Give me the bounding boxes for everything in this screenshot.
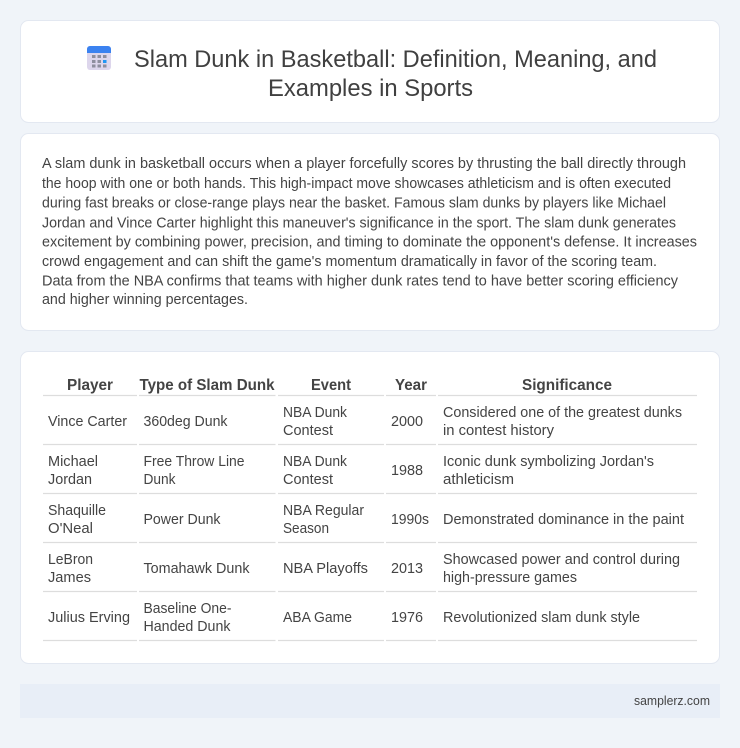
- row: Julius Erving: Baseline One-: [144, 601, 232, 617]
- row: Julius Erving: Julius Erving: [48, 610, 130, 626]
- title: [134, 46, 657, 102]
- row: Shaquille O'Neal: Power Dunk: [144, 512, 221, 528]
- text block: description: and higher winning percentages.: [42, 292, 248, 308]
- text block: description: Jordan and Vince Carter highlight this maneuver's significance in the sport. The slam dunk generates: [42, 216, 676, 232]
- row: LeBron James: [48, 552, 680, 586]
- row: LeBron James: high-pressure games: [443, 570, 577, 586]
- row: Shaquille O'Neal: NBA Regular: [283, 503, 364, 519]
- row: LeBron James: Tomahawk Dunk: [144, 561, 250, 577]
- table header: Year: [395, 377, 427, 394]
- row: Michael Jordan: Iconic dunk symbolizing Jordan's: [443, 454, 654, 470]
- row: LeBron James: James: [48, 570, 91, 586]
- footer bar: [20, 684, 720, 718]
- table: [43, 377, 697, 640]
- row: Shaquille O'Neal: O'Neal: [48, 521, 93, 537]
- title: Examples in Sports: [268, 75, 473, 102]
- table header: [67, 377, 612, 394]
- row: Shaquille O'Neal: Demonstrated dominance in the paint: [443, 512, 684, 528]
- row: Shaquille O'Neal: [48, 503, 684, 537]
- row: Michael Jordan: Michael: [48, 454, 98, 470]
- row: Michael Jordan: Jordan: [48, 472, 92, 488]
- row: Julius Erving: Revolutionized slam dunk style: [443, 610, 640, 626]
- row: Vince Carter: NBA Dunk: [283, 405, 348, 421]
- row: Vince Carter: Vince Carter: [48, 414, 127, 430]
- row: Michael Jordan: [48, 454, 654, 488]
- panel: title card: [20, 20, 720, 122]
- row: Michael Jordan: Contest: [283, 472, 333, 488]
- row: Shaquille O'Neal: 1990s: [391, 512, 429, 528]
- text block: description: [42, 156, 697, 308]
- table header: Player: [67, 377, 113, 394]
- text block: description: A slam dunk in basketball occurs when a player forcefully scores by thrusting the ball directly through: [42, 156, 686, 172]
- text block: description: the hoop with one or both hands. This high-impact move showcases athleticism and is often executed: [42, 176, 671, 192]
- row: LeBron James: NBA Playoffs: [283, 561, 368, 577]
- text block: description: during fast breaks or close-range plays near the basket. Famous slam dunks by players like Michael: [42, 196, 666, 212]
- row: Michael Jordan: NBA Dunk: [283, 454, 348, 470]
- text block: description: crowd engagement and can shift the game's momentum dramatically in favor of the scoring team.: [42, 254, 657, 270]
- row: LeBron James: Showcased power and control during: [443, 552, 680, 568]
- row: Michael Jordan: athleticism: [443, 472, 514, 488]
- row: Michael Jordan: Dunk: [144, 472, 176, 488]
- row: Vince Carter: in contest history: [443, 423, 555, 439]
- row: Vince Carter: Contest: [283, 423, 333, 439]
- table header: Type of Slam Dunk: [140, 377, 275, 394]
- title: Slam Dunk in Basketball: Definition, Meaning, and: [134, 46, 657, 73]
- text block: description: Data from the NBA confirms that teams with higher dunk rates tend to have better scoring efficiency: [42, 274, 679, 290]
- row: Michael Jordan: 1988: [391, 463, 423, 479]
- row: Shaquille O'Neal: Shaquille: [48, 503, 106, 519]
- footer text: samplerz.com: [634, 693, 710, 708]
- row: Vince Carter: 360deg Dunk: [144, 414, 228, 430]
- row: Shaquille O'Neal: Season: [283, 521, 329, 537]
- table header: Significance: [522, 377, 612, 394]
- row: Michael Jordan: Free Throw Line: [144, 454, 244, 470]
- row: Vince Carter: [48, 405, 682, 439]
- row: Julius Erving: 1976: [391, 610, 423, 626]
- panel: table card: [20, 352, 720, 664]
- text block: description: excitement by combining power, precision, and timing to dominate the opponent's defense. It increases: [42, 234, 697, 250]
- row: Vince Carter: Considered one of the greatest dunks: [443, 405, 682, 421]
- table header: Event: [311, 377, 352, 394]
- row: LeBron James: LeBron: [48, 552, 93, 568]
- row: Vince Carter: 2000: [391, 414, 423, 430]
- row: Julius Erving: [48, 601, 640, 635]
- row: Julius Erving: ABA Game: [283, 610, 352, 626]
- row: LeBron James: 2013: [391, 561, 423, 577]
- row: Julius Erving: Handed Dunk: [144, 619, 231, 635]
- icon: calendar: [87, 46, 111, 70]
- panel: description card: [20, 134, 720, 330]
